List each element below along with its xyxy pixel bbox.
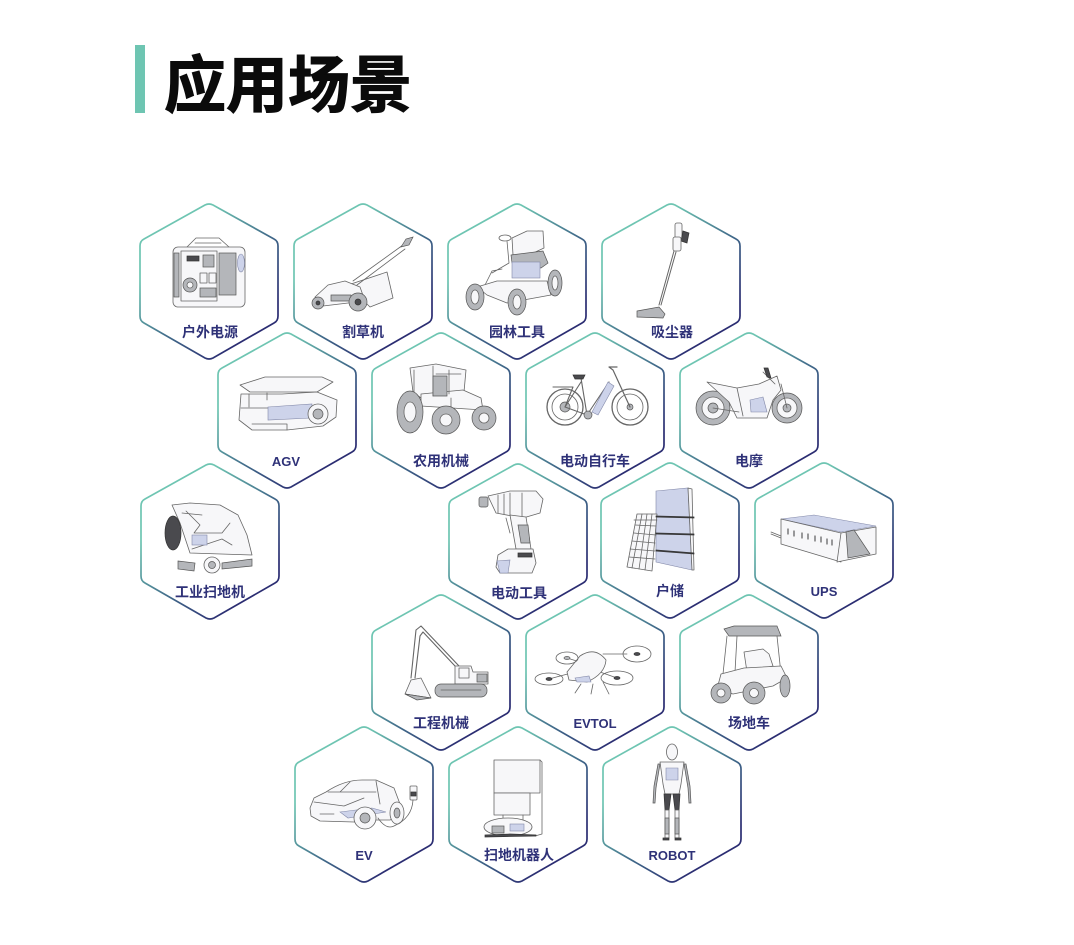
icon: excavator <box>405 626 488 700</box>
label: 工业扫地机 <box>175 584 245 600</box>
panel: 工业扫地机 <box>141 464 279 619</box>
label: 割草机 <box>342 324 384 340</box>
label: EV <box>355 848 373 863</box>
panel: 电动工具 <box>449 464 587 619</box>
label: 户储 <box>656 583 684 599</box>
label: 扫地机器人 <box>484 847 554 863</box>
icon: tractor <box>397 364 496 434</box>
panel: 园林工具 <box>448 204 586 359</box>
panel: EVTOL <box>526 595 664 750</box>
label: 农用机械 <box>413 453 469 469</box>
panel: AGV <box>218 333 356 488</box>
label: EVTOL <box>573 716 617 731</box>
panel: 农用机械 <box>372 333 510 488</box>
title accent bar <box>135 45 145 113</box>
icon: cordless drill <box>479 491 543 573</box>
label: 电动工具 <box>491 585 547 601</box>
panel: 扫地机器人 <box>449 727 587 882</box>
panel: 场地车 <box>680 595 818 750</box>
label: AGV <box>272 454 300 469</box>
panel: 工程机械 <box>372 595 510 750</box>
icon: lawn mower <box>312 237 413 311</box>
panel: 割草机 <box>294 204 432 359</box>
panel: EV <box>295 727 433 882</box>
icon: stick vacuum <box>637 223 689 318</box>
panel: 吸尘器 <box>602 204 740 359</box>
label: UPS <box>811 584 838 599</box>
icon: electric bicycle <box>547 367 648 425</box>
label: 园林工具 <box>489 324 545 340</box>
icon: industrial floor scrubber <box>165 503 252 573</box>
panel: UPS <box>755 463 893 618</box>
icon: AGV robot <box>239 377 337 430</box>
label: 吸尘器 <box>651 324 693 340</box>
panel: 电摩 <box>680 333 818 488</box>
icon: humanoid robot <box>653 744 691 840</box>
icon: riding mower <box>466 231 562 315</box>
label: 电摩 <box>735 453 763 469</box>
panel: 电动自行车 <box>526 333 664 488</box>
label: 户外电源 <box>182 324 238 340</box>
panel: 户储 <box>601 463 739 618</box>
label: 电动自行车 <box>560 453 630 469</box>
icon: robot vacuum with dock <box>484 760 542 837</box>
icon: electric car with charger <box>310 780 417 829</box>
panel: 户外电源 <box>140 204 278 359</box>
title: 应用场景 <box>164 35 412 125</box>
label: ROBOT <box>649 848 696 863</box>
icon: electric motorcycle <box>696 368 802 425</box>
icon: portable power station <box>173 238 245 307</box>
label: 场地车 <box>728 715 770 731</box>
icon: eVTOL aircraft <box>535 646 651 694</box>
icon: home energy storage and solar panel <box>627 488 694 571</box>
label: 工程机械 <box>413 715 469 731</box>
panel: ROBOT <box>603 727 741 882</box>
icon: golf cart <box>711 626 790 704</box>
icon: UPS power unit <box>771 515 876 562</box>
